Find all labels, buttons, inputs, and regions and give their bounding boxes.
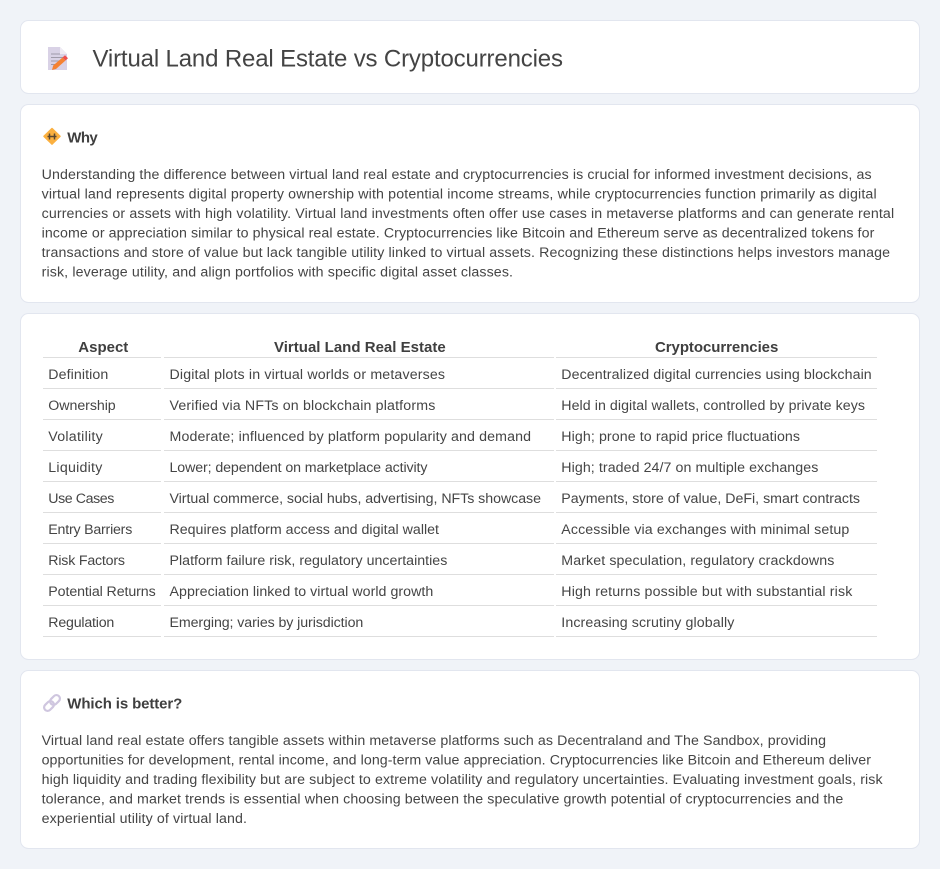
row: entry barriers: Entry Barriers [48, 522, 132, 538]
text block: why: income or appreciation similar to physical real estate. Cryptocurrencies like Bitcoin and Ethereum serve as decentralized tokens for [42, 226, 875, 242]
row: potential returns: High returns possible but with substantial risk [561, 584, 853, 600]
row: regulation: Emerging; varies by jurisdiction [170, 615, 363, 631]
row: use cases: Use Cases [48, 491, 114, 507]
text block: why: Understanding the difference between virtual land real estate and cryptocurrencies is crucial for informed investment decisions, as [42, 167, 872, 183]
text block: which is better: high liquidity and trading flexibility but are subject to extreme volatility and regulatory uncertainties. Evaluating investment goals, risk [42, 772, 884, 788]
row: liquidity: Lower; dependent on marketplace activity [170, 460, 428, 476]
panel: which is better [20, 670, 920, 848]
row: potential returns [48, 584, 853, 600]
text block: which is better: Virtual land real estate offers tangible assets within metaverse platforms such as Decentraland and The Sandbox, providing [42, 733, 826, 749]
text block: which is better: opportunities for development, rental income, and long-term value appreciation. Cryptocurrencies like Bitcoin and Ethereum deliver [42, 752, 871, 768]
title: Virtual Land Real Estate vs Cryptocurrencies [92, 46, 563, 73]
row: entry barriers: Accessible via exchanges with minimal setup [561, 522, 849, 538]
row: use cases [48, 491, 860, 507]
table header: Virtual Land Real Estate [274, 339, 446, 356]
row: definition [48, 367, 872, 383]
text block: why [42, 167, 894, 280]
text block: which is better [42, 733, 884, 827]
row: ownership [48, 398, 865, 414]
row: ownership: Held in digital wallets, controlled by private keys [561, 398, 865, 414]
text block: which is better: experiential utility of virtual land. [42, 811, 247, 827]
text block: why: risk, leverage utility, and align portfolios with specific digital asset classes. [42, 264, 513, 280]
panel: why [20, 104, 920, 302]
row: regulation [48, 615, 735, 631]
row: ownership: Verified via NFTs on blockchain platforms [170, 398, 435, 414]
icon: orange warning diamond [44, 128, 60, 144]
row: regulation: Regulation [48, 615, 114, 631]
panel: title header [20, 20, 920, 94]
row: potential returns: Potential Returns [48, 584, 156, 600]
row: definition: Definition [48, 367, 108, 383]
row: liquidity: High; traded 24/7 on multiple exchanges [561, 460, 818, 476]
row: risk factors: Market speculation, regulatory crackdowns [561, 553, 834, 569]
icon: chain link [43, 694, 61, 712]
text block: why: currencies or assets with high volatility. Virtual land investments often offer use cases in metaverse platforms and can generate rental [42, 206, 894, 222]
table header: Cryptocurrencies [655, 339, 778, 356]
row: risk factors [48, 553, 834, 569]
text block: why: virtual land represents digital property ownership with potential income streams, while cryptocurrencies function primarily as digital [42, 186, 877, 202]
row: entry barriers [48, 522, 849, 538]
row: liquidity: Liquidity [48, 460, 103, 476]
text block: why: transactions and store of value but lack tangible utility linked to virtual assets. Recognizing these distinctions helps investors manage [42, 245, 890, 261]
row: regulation: Increasing scrutiny globally [561, 615, 735, 631]
row: liquidity [48, 460, 818, 476]
row: volatility [48, 429, 800, 445]
row: potential returns: Appreciation linked to virtual world growth [170, 584, 433, 600]
heading: why: Why [67, 129, 98, 146]
table header [78, 339, 778, 356]
row: use cases: Payments, store of value, DeFi, smart contracts [561, 491, 860, 507]
icon: document with pencil [48, 47, 68, 70]
row: ownership: Ownership [48, 398, 116, 414]
text block: which is better: tolerance, and market trends is essential when choosing between the speculative growth potential of cryptocurrencies and the [42, 792, 843, 808]
row: entry barriers: Requires platform access and digital wallet [170, 522, 439, 538]
row: volatility: Moderate; influenced by platform popularity and demand [170, 429, 531, 445]
panel: comparison table [20, 314, 920, 660]
table header: Aspect [78, 339, 128, 356]
row: use cases: Virtual commerce, social hubs, advertising, NFTs showcase [170, 491, 541, 507]
row: risk factors: Platform failure risk, regulatory uncertainties [170, 553, 447, 569]
row: volatility: High; prone to rapid price fluctuations [561, 429, 800, 445]
row: volatility: Volatility [48, 429, 104, 445]
row: risk factors: Risk Factors [48, 553, 125, 569]
heading: which is better: Which is better? [67, 695, 182, 712]
row: definition: Decentralized digital currencies using blockchain [561, 367, 872, 383]
row: definition: Digital plots in virtual worlds or metaverses [170, 367, 445, 383]
